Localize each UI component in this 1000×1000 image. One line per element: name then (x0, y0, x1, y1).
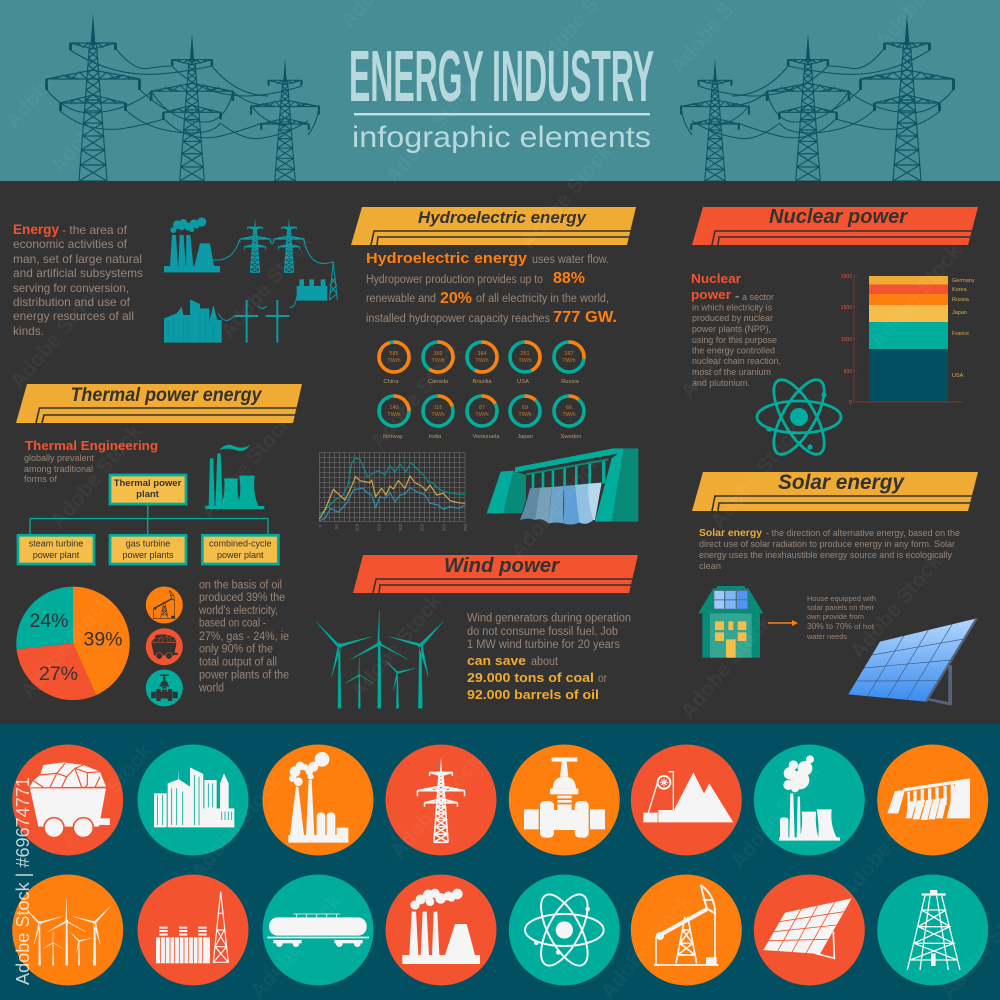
stock watermark: Adobe Stock (726, 760, 827, 873)
text: nuclear power: and plutonium. (692, 378, 750, 389)
text: house note: 30% to 70% (807, 622, 852, 631)
icon circles row 1 and 2 (12, 744, 988, 986)
banner: solar energy (692, 471, 978, 511)
donut charts: hydropower output by country: 364 (477, 351, 487, 357)
diagram: thermal power plant hierarchy: power plant (33, 550, 80, 560)
text: hydroelectric statistics: 88% (553, 270, 585, 287)
stock watermark: Adobe Stock (506, 450, 607, 563)
icon: atom white (525, 888, 604, 972)
donut charts: hydropower output by country: Venezuela (472, 434, 500, 440)
header band (0, 0, 1000, 181)
text: energy intro (13, 221, 143, 338)
donut charts: hydropower output by country: TW/h (562, 358, 576, 364)
text: thermal share explanation: total output of all (199, 657, 277, 669)
stock watermark: Adobe Stock (6, 280, 107, 393)
icon: white solar panel (763, 898, 852, 958)
stock watermark: Adobe Stock (366, 340, 467, 453)
text: nuclear power: power plants (NPP), (692, 324, 771, 335)
icon: thermal factory (402, 889, 480, 964)
text: wind power: 92.000 barrels of oil (467, 687, 599, 702)
text: thermal engineering: among traditional (24, 464, 93, 474)
text: solar energy: Solar energy (699, 527, 762, 539)
text: energy intro: distribution and use of (13, 295, 131, 309)
donut charts: hydropower output by country: China (383, 379, 399, 385)
stacked bar chart: nuclear output (841, 274, 975, 406)
banner: solar energy: Solar energy (778, 471, 905, 494)
text: hydroelectric statistics: of all electricity in the world, (476, 293, 609, 305)
line chart: 100 (355, 523, 360, 531)
icon: solar panel (848, 618, 977, 706)
text: wind power: can save (467, 653, 526, 668)
stacked bar chart: nuclear output: Japan (952, 310, 967, 316)
donut charts: hydropower output by country: India (429, 434, 442, 440)
text: solar energy: energy uses the inexhaustible energy source and is ecologically (699, 550, 952, 561)
text: wind power (467, 613, 631, 702)
text: nuclear power: the energy controlled (692, 346, 775, 356)
text: wind power: do not consume fossil fuel. Job (467, 626, 618, 638)
bottom icon panel (0, 724, 1000, 1000)
stacked bar chart: nuclear output: 0 (849, 400, 852, 406)
stacked bar chart: nuclear output: Korea (952, 287, 968, 293)
pie chart: 24% (29, 610, 69, 632)
stacked bar chart: nuclear output: 1000 (841, 337, 852, 343)
donut charts: hydropower output by country: 116 (434, 405, 442, 411)
stock watermark: Adobe Stock (866, 240, 967, 353)
icon: pipeline valve (524, 757, 605, 838)
banner: wind power: Wind power (444, 555, 560, 577)
text: house note: solar panels on their (807, 605, 875, 612)
stacked bar chart: nuclear output: 1500 (841, 305, 852, 311)
text: wind power: or (598, 673, 607, 685)
pie chart: 39% (83, 629, 123, 651)
text: thermal share explanation: based on coal - (199, 618, 266, 630)
icon: wind turbines (316, 610, 443, 708)
stock watermark: Adobe Stock (381, 75, 482, 188)
icon: thermal plant (206, 445, 264, 509)
text: hydroelectric statistics: Hydroelectric energy (366, 250, 528, 267)
stock watermark: Adobe Stock (596, 890, 697, 1000)
donut charts: hydropower output by country: TW/h (562, 412, 576, 418)
donut charts: hydropower output by country: 66 (566, 405, 572, 411)
stock watermark: Adobe (1, 68, 61, 133)
text: nuclear power: using for this purpose (692, 335, 777, 346)
text: thermal engineering: Thermal Engineering (25, 438, 158, 453)
icon: oil pump (654, 885, 718, 965)
banner: wind power (353, 555, 638, 593)
donut charts: hydropower output by country: TW/h (518, 358, 532, 364)
text: energy intro: and artificial subsystems (13, 266, 143, 280)
stock watermark: Adobe Stock (676, 290, 777, 403)
text: thermal share explanation: 27%, gas - 24%, ie (199, 631, 289, 643)
icon: city (154, 767, 234, 827)
donut charts: hydropower output by country: Japan (517, 434, 533, 440)
text: solar energy: - the direction of alternative energy, based on the (766, 528, 960, 539)
text: hydroelectric statistics: Hydropower production provides up to (366, 274, 543, 286)
stacked bar chart: nuclear output: 500 (844, 369, 852, 375)
stock watermark: Adobe Stock (186, 770, 287, 883)
text: energy intro: - the area of (62, 223, 128, 237)
icon: oil derrick (907, 890, 960, 970)
left pylons (45, 13, 320, 181)
donut charts: hydropower output by country: TW/h (431, 412, 445, 418)
line chart: 250 (420, 523, 425, 531)
donut charts: hydropower output by country: Sweden (561, 434, 581, 440)
text: thermal share explanation: only 90% of the (199, 644, 273, 656)
text: wind power: about (531, 656, 559, 668)
line chart: 150 (376, 523, 381, 531)
stock watermark: Adobe Stock (516, 140, 617, 253)
text: energy intro: man, set of large natural (13, 252, 142, 266)
donut charts: hydropower output by country: 140 (389, 405, 399, 411)
stock watermark: Adobe Stock (676, 610, 777, 723)
donut charts: hydropower output by country: 87 (479, 405, 485, 411)
donut charts: hydropower output by country: 69 (522, 405, 528, 411)
stock watermark: Adobe Stock (706, 420, 807, 533)
text: energy intro: economic activities of (13, 237, 128, 251)
donut charts: hydropower output by country: TW/h (518, 412, 532, 418)
text: thermal share explanation (198, 579, 289, 694)
text: thermal share explanation: produced 39% the (199, 592, 285, 604)
text: thermal share explanation: on the basis of oil (199, 579, 282, 591)
text: hydroelectric statistics: 20% (440, 290, 472, 307)
diagram: thermal power plant hierarchy (18, 475, 278, 564)
donut charts: hydropower output by country: 251 (520, 351, 530, 357)
stacked bar chart: nuclear output: USA (952, 373, 964, 379)
text: house note: water needs (806, 634, 848, 641)
icon: nuclear plant with cooling towers (779, 755, 840, 841)
stacked bar chart: nuclear output: France (952, 331, 969, 337)
stacked bar chart: nuclear output: 2000 (841, 274, 852, 280)
text: thermal engineering (24, 438, 158, 484)
donut charts: hydropower output by country: Canada (428, 379, 449, 385)
text: nuclear power: - (735, 288, 739, 303)
line chart (317, 453, 468, 531)
donut charts: hydropower output by country: 167 (564, 351, 574, 357)
icon: atom (757, 373, 841, 461)
line chart: 300 (441, 523, 446, 531)
stacked bar chart: nuclear output: Germany (952, 278, 975, 284)
icon: tank wagon (267, 914, 369, 947)
stock watermark: Adobe Stock (386, 750, 487, 863)
dark main panel (0, 181, 1000, 724)
text: wind power: 29.000 tons of coal (467, 670, 594, 685)
donut charts: hydropower output by country: TW/h (431, 358, 445, 364)
text: nuclear power: produced by nuclear (692, 313, 773, 324)
donut charts: hydropower output by country: TW/h (387, 358, 401, 364)
icon: smoke stacks (288, 752, 348, 843)
stock watermark: Adobe Stock (46, 420, 147, 533)
text: nuclear power: Nuclear (691, 271, 741, 286)
text: thermal share explanation: power plants of the (199, 669, 289, 681)
banner: nuclear power (692, 206, 978, 245)
title: infographic elements (352, 121, 651, 154)
stock watermark: Adobe (46, 113, 106, 178)
banner: thermal power energy: Thermal power energy (70, 385, 263, 406)
banner: nuclear power: Nuclear power (769, 206, 908, 228)
stock watermark: Adobe Stock (196, 410, 297, 523)
text: nuclear power: power (691, 287, 731, 302)
text: house note: of hot (854, 624, 874, 631)
stacked bar chart: nuclear output: Russia (952, 297, 970, 303)
line chart: 200 (398, 523, 403, 531)
text: nuclear power (691, 271, 781, 389)
pie chart (16, 587, 130, 700)
diagram: thermal power plant hierarchy: plant (136, 489, 160, 500)
text: hydroelectric statistics: installed hydropower capacity reaches (366, 313, 550, 325)
line chart: 350 (463, 523, 468, 531)
text: house note: House equipped with (807, 596, 876, 603)
stock watermark: Adobe Stock (56, 740, 157, 853)
icon: power generation and distribution scheme (164, 217, 337, 343)
text: solar energy: clean (699, 561, 721, 572)
icon: hydro dam (487, 448, 638, 525)
donut charts: hydropower output by country: Norway (383, 434, 403, 440)
text: nuclear power: a sector (742, 292, 774, 303)
icon: coal cart (29, 762, 110, 838)
line chart: 50 (334, 524, 339, 529)
donut charts: hydropower output by country: Brazilia (472, 379, 492, 385)
text: thermal engineering: globally prevalent (24, 453, 94, 463)
text: thermal engineering: forms of (24, 474, 57, 484)
pie chart: 27% (39, 663, 78, 685)
text: nuclear power: nuclear chain reaction, (692, 356, 781, 367)
text: energy intro: serving for conversion, (13, 281, 129, 295)
text: hydroelectric statistics: 777 GW. (553, 309, 617, 326)
stock watermark: Adobe S (666, 0, 739, 78)
icon: solar house (698, 586, 763, 658)
icon: substation and mast (156, 892, 228, 963)
stock watermark: Adobe Stock (16, 590, 117, 703)
stock watermark: Adobe Stock (346, 590, 447, 703)
diagram: thermal power plant hierarchy: steam turbine (29, 539, 83, 549)
title (349, 37, 654, 154)
diagram: thermal power plant hierarchy: gas turbine (126, 539, 170, 549)
text: solar energy: direct use of solar radiation to produce energy in any form. Solar (699, 539, 955, 550)
donut charts: hydropower output by country: TW/h (475, 412, 489, 418)
icon: wind turbines white (24, 898, 110, 965)
diagram: thermal power plant hierarchy: power plants (122, 550, 174, 560)
icon: white dam (887, 778, 970, 820)
donut charts: hydropower output by country: 369 (433, 351, 443, 357)
diagram: thermal power plant hierarchy: power plant (217, 550, 264, 560)
text: hydroelectric statistics (366, 250, 617, 326)
banner: hydroelectric energy (351, 207, 636, 245)
stock watermark: Adobe Stock (246, 890, 347, 1000)
donut charts: hydropower output by country: USA (517, 379, 529, 385)
donut charts: hydropower output by country: 585 (389, 351, 399, 357)
text: hydroelectric statistics: uses water flow. (532, 254, 609, 266)
icon: transmission tower (417, 757, 465, 842)
text: energy intro: Energy (13, 221, 59, 237)
text: energy intro: kinds. (13, 324, 44, 338)
right pylons (680, 13, 955, 181)
text: house note: own provide from (807, 614, 864, 621)
text: nuclear power: most of the uranium (692, 367, 771, 378)
donut charts: hydropower output by country: TW/h (387, 412, 401, 418)
banner: hydroelectric energy: Hydroelectric energy (418, 208, 588, 227)
stock watermark: Adobe Stock (846, 550, 947, 663)
diagram: thermal power plant hierarchy: Thermal power (114, 478, 182, 489)
text: house note (806, 596, 876, 641)
stock watermark: Adobe Stock (216, 230, 317, 343)
stock id text: Adobe Stock | #69674771 (12, 777, 33, 985)
text: hydroelectric statistics: renewable and (366, 293, 436, 305)
stock watermark: Adobe Stock (836, 790, 937, 903)
text: energy intro: energy resources of all (13, 309, 134, 323)
donut charts: hydropower output by country (379, 342, 584, 440)
text: thermal share explanation: world (198, 682, 224, 694)
line chart: 0 (317, 524, 322, 527)
icons: oil, coal and gas (146, 586, 183, 706)
text: wind power: Wind generators during operation (467, 613, 631, 625)
text: nuclear power: in which electricity is (692, 302, 772, 314)
arrow: house to text (768, 620, 798, 626)
banner: thermal power energy (16, 384, 304, 423)
diagram: thermal power plant hierarchy: combined-cycle (209, 539, 272, 549)
donut charts: hydropower output by country: TW/h (475, 358, 489, 364)
text: thermal share explanation: world's electricity, (198, 605, 278, 617)
text: wind power: 1 MW wind turbine for 20 years (467, 639, 620, 651)
icon: mine and mountains (643, 772, 733, 822)
text: solar energy (699, 527, 960, 572)
donut charts: hydropower output by country: Russia (561, 379, 580, 385)
